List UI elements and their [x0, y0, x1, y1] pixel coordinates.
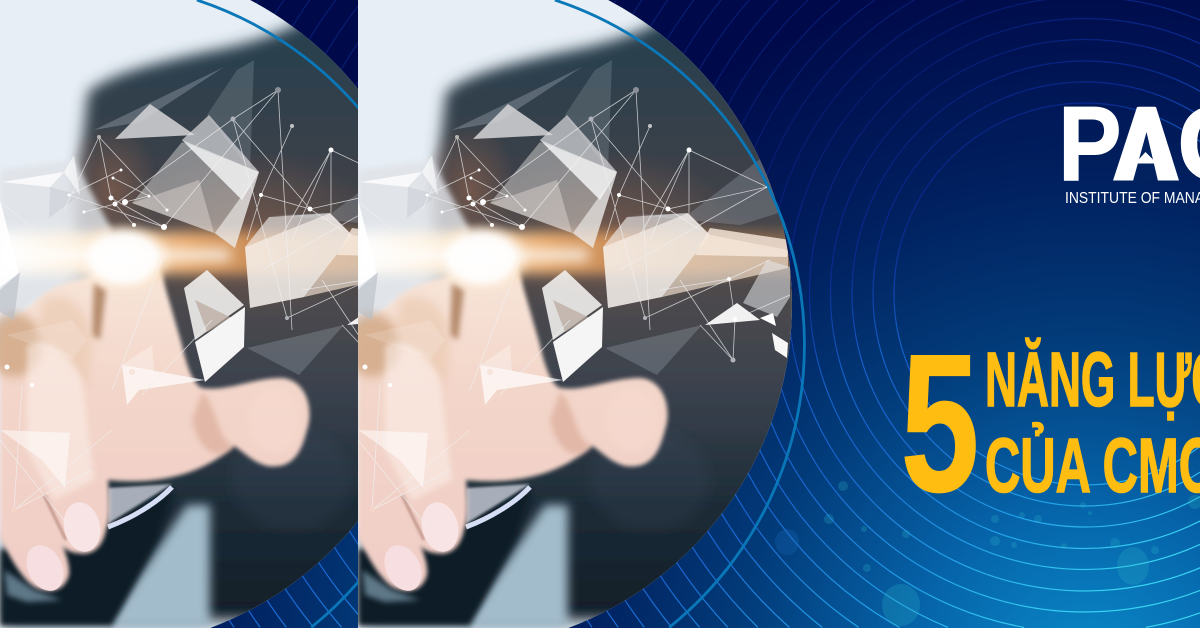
bokeh dots: [775, 481, 1200, 626]
logo A counter: [1133, 132, 1158, 181]
concentric rings: [276, 0, 1200, 627]
photo background: [285, 0, 805, 628]
photo disc: [285, 0, 805, 628]
middle finger shade: [395, 296, 450, 390]
warm suit tones: [480, 150, 740, 320]
warm tones by the wrist: [422, 120, 518, 260]
network lines: [358, 90, 790, 530]
thumb knuckle shade: [550, 392, 592, 454]
thumb highlight: [606, 388, 658, 452]
grey haze left of hand: [358, 160, 470, 330]
logo letters: [1058, 85, 1200, 203]
logo A solid fill: [1113, 107, 1179, 180]
panel: left repeated artwork: [0, 0, 358, 628]
sleeve highlight: [462, 505, 568, 628]
streak of orange light: [358, 232, 803, 274]
lower suit tone: [590, 430, 710, 530]
finger highlight: [385, 343, 452, 500]
title: [900, 314, 1200, 533]
background gradient: [211, 48, 1200, 628]
fingertip glow: [432, 222, 532, 294]
cuff edge: [466, 487, 530, 527]
big number: 5: [900, 314, 979, 533]
brown shadow next to index finger: [450, 282, 464, 340]
logo letters: P: [1058, 85, 1122, 203]
geometric shards: [358, 104, 790, 488]
nail middle: [377, 539, 429, 597]
network nodes: [362, 87, 768, 513]
hand: [358, 238, 668, 591]
logo: [1058, 85, 1200, 207]
tan patch left of hand: [344, 313, 400, 377]
lower left cuff tone: [362, 570, 420, 602]
finger gap: [402, 495, 424, 540]
dark sleeve: [358, 490, 532, 626]
shirt cuff: [466, 484, 530, 524]
suit silhouette: [365, 15, 805, 620]
logo A peak: [1135, 152, 1157, 164]
logo letters: A: [1113, 86, 1180, 203]
light flare core: [358, 250, 588, 260]
panel: right artwork: [358, 0, 1200, 628]
nail index: [417, 499, 463, 555]
faint grey shards: [452, 60, 788, 375]
blue arc: [555, 0, 804, 627]
